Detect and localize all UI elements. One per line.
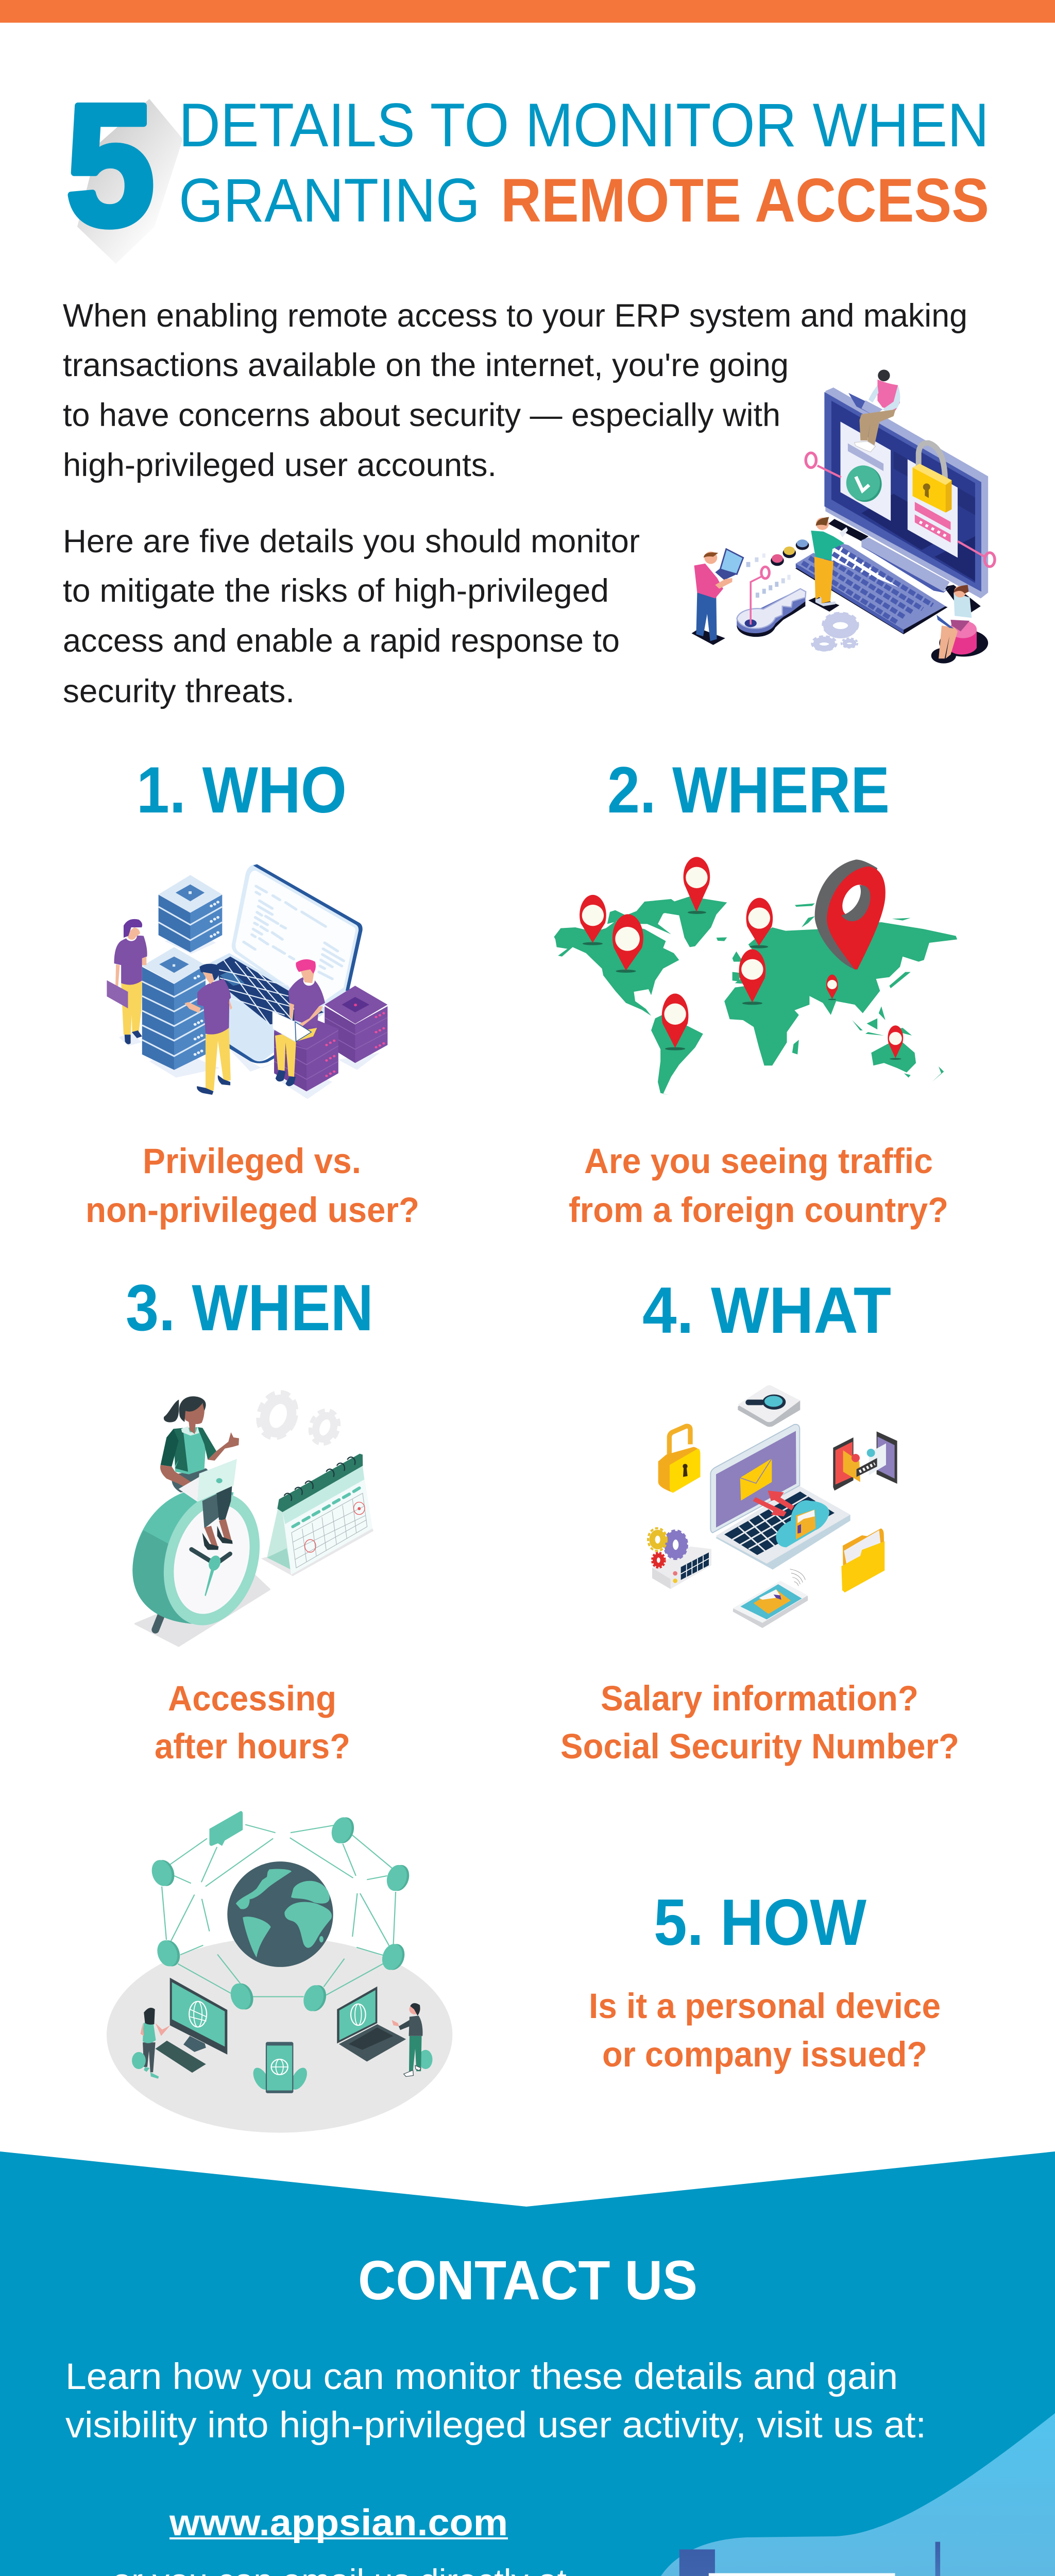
figure: standing man in green bbox=[808, 517, 848, 612]
figure: woman with laptop bbox=[160, 1396, 239, 1550]
contact paragraph bbox=[65, 2357, 926, 2446]
light blue blob bbox=[478, 2413, 1055, 2576]
contact paragraph: visibility into high-privileged user activity, visit us at: bbox=[65, 2405, 926, 2446]
shadows bbox=[119, 929, 380, 1099]
gears bbox=[252, 1387, 343, 1448]
laptop bbox=[337, 1987, 406, 2062]
big pin bbox=[815, 859, 886, 970]
intro paragraph one bbox=[63, 298, 967, 483]
intro text bbox=[63, 298, 967, 709]
laptop bbox=[210, 864, 363, 1063]
city skyline bbox=[679, 2542, 1055, 2576]
blue background with notch bbox=[0, 2151, 1055, 2576]
figure: seated man on monitor bbox=[848, 370, 900, 452]
website link: www.appsian.com bbox=[169, 2502, 508, 2544]
intro paragraph one: transactions available on the internet, you're going bbox=[63, 347, 789, 383]
caption: what: Salary information? bbox=[601, 1679, 918, 1718]
heading: 4. WHAT: 4. WHAT bbox=[642, 1274, 891, 1347]
caption: who: non-privileged user? bbox=[86, 1190, 419, 1230]
icon: rings bbox=[751, 453, 995, 623]
server stack one bbox=[159, 875, 222, 952]
server stack purple left bbox=[274, 1020, 338, 1091]
heading: 2. WHERE: 2. WHERE bbox=[607, 753, 890, 826]
caption: how: or company issued? bbox=[602, 2035, 927, 2074]
icon: padlock bbox=[658, 1426, 700, 1493]
figure: pink hair person with laptop bbox=[273, 959, 325, 1086]
caption: where: from a foreign country? bbox=[569, 1190, 948, 1230]
heading: 3. WHEN: 3. WHEN bbox=[126, 1271, 373, 1344]
icon: phones bbox=[833, 1431, 897, 1490]
document bbox=[709, 2573, 895, 2576]
figure: man bbox=[392, 2003, 433, 2077]
caption: when: Accessing bbox=[168, 1679, 336, 1718]
clock shadow bbox=[135, 1575, 269, 1646]
intro paragraph two: security threats. bbox=[63, 673, 295, 709]
figure: woman bbox=[132, 2008, 171, 2079]
illustration: monitor with security bbox=[691, 370, 995, 664]
caption: who: Privileged vs. bbox=[143, 1141, 361, 1181]
caption: where bbox=[569, 1141, 948, 1230]
title highlight: REMOTE ACCESS bbox=[501, 166, 989, 235]
globe bbox=[227, 1861, 333, 1967]
heading: contact us: CONTACT US bbox=[358, 2249, 697, 2311]
icon: phone with folder bbox=[733, 1569, 808, 1628]
caption: when bbox=[155, 1679, 350, 1766]
icon: server with gears bbox=[648, 1528, 711, 1589]
panel: contact section bbox=[0, 2151, 1055, 2576]
illustration: email and website bbox=[636, 2542, 1055, 2576]
illustration: servers and laptop bbox=[107, 864, 387, 1099]
server stack purple right bbox=[325, 986, 387, 1063]
monitor and keyboard bbox=[156, 1978, 227, 2073]
big numeral 5 shadow bbox=[77, 99, 183, 264]
intro paragraph two: Here are five details you should monitor bbox=[63, 523, 640, 560]
pin shadows bbox=[583, 911, 901, 1060]
icon: magnifier tile bbox=[738, 1385, 800, 1427]
illustration: laptop with data bbox=[648, 1385, 897, 1628]
heading: 5. HOW: 5. HOW bbox=[654, 1886, 866, 1959]
intro paragraph one: high-privileged user accounts. bbox=[63, 447, 497, 483]
phone bbox=[250, 2042, 310, 2093]
icon: folder bbox=[841, 1529, 884, 1592]
laptop bbox=[710, 1425, 850, 1570]
caption: how: Is it a personal device bbox=[589, 1986, 941, 2026]
ground ellipse bbox=[107, 1937, 452, 2133]
intro paragraph two: to mitigate the risks of high-privileged bbox=[63, 573, 609, 609]
world map bbox=[554, 896, 957, 1095]
icon: gears bbox=[812, 614, 858, 650]
icon: buttons bbox=[746, 539, 809, 598]
alarm clock bbox=[132, 1482, 275, 1637]
illustration: world map with pins bbox=[554, 857, 957, 1095]
figure: man at server bbox=[184, 964, 232, 1095]
figure: woman on stool bbox=[931, 585, 988, 664]
figure: man with tablet bbox=[691, 549, 743, 645]
illustration: clock and calendar bbox=[132, 1387, 373, 1646]
caption: where: Are you seeing traffic bbox=[584, 1141, 933, 1181]
icon: chat bubble bbox=[210, 1811, 243, 1846]
icon: key bbox=[737, 589, 806, 637]
intro paragraph one: When enabling remote access to your ERP system and making bbox=[63, 298, 967, 334]
caption: what bbox=[560, 1679, 959, 1766]
heading: 1. WHO: 1. WHO bbox=[137, 753, 347, 826]
title line two: GRANTING bbox=[179, 166, 480, 235]
caption: who bbox=[86, 1141, 419, 1230]
server stack two bbox=[142, 947, 206, 1070]
top orange bar bbox=[0, 0, 1055, 23]
map pins bbox=[580, 857, 903, 1058]
illustration: global network devices bbox=[107, 1811, 452, 2133]
caption: what: Social Security Number? bbox=[560, 1726, 959, 1766]
intro paragraph two: access and enable a rapid response to bbox=[63, 623, 620, 659]
calendar bbox=[261, 1454, 373, 1576]
intro paragraph two bbox=[63, 523, 640, 709]
figure: woman with folder bbox=[107, 919, 147, 1044]
network nodes bbox=[149, 1815, 412, 2013]
title line one: DETAILS TO MONITOR WHEN bbox=[179, 91, 989, 160]
big numeral 5: 5 bbox=[66, 69, 155, 261]
network lines bbox=[162, 1824, 396, 1997]
intro paragraph one: to have concerns about security — especially with bbox=[63, 397, 780, 433]
caption: how bbox=[589, 1986, 941, 2074]
contact paragraph: Learn how you can monitor these details and gain bbox=[65, 2357, 898, 2397]
caption: when: after hours? bbox=[155, 1726, 350, 1766]
title block bbox=[66, 69, 989, 264]
